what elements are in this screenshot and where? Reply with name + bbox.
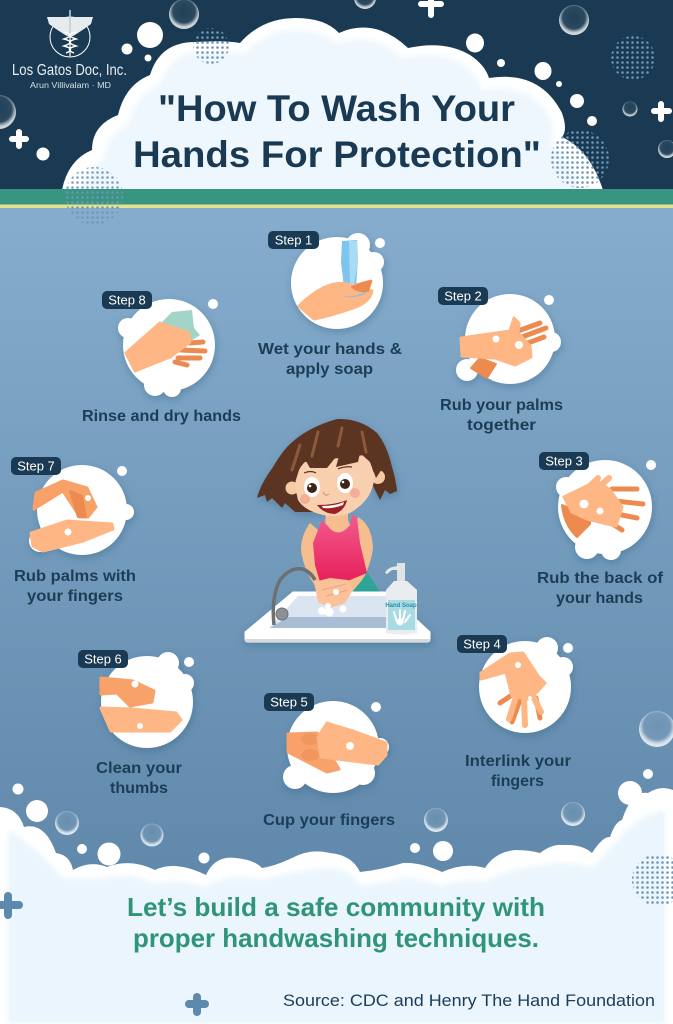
step 3 <box>537 452 664 607</box>
bottom white bubbles <box>12 769 653 866</box>
ears <box>286 470 385 494</box>
icon: palms with fingers <box>31 481 113 551</box>
halftone dots over band <box>65 167 123 225</box>
step 3: Step 3 <box>545 454 583 468</box>
icon: rubbing palms <box>461 318 546 378</box>
skin arms and neck <box>301 508 373 600</box>
step 6 caption <box>96 760 182 797</box>
skirt <box>352 573 380 592</box>
step 2 pill <box>438 287 488 305</box>
title <box>133 88 541 175</box>
icon: cupped fingers <box>288 723 386 772</box>
step 6 bubble <box>101 652 194 748</box>
step 4 caption: Interlink your <box>465 753 571 770</box>
bottom plus icons <box>0 896 205 1012</box>
logo: Los Gatos Doc <box>12 10 127 90</box>
step 7 caption: your fingers <box>27 588 123 605</box>
icon: caduceus emblem <box>47 10 93 57</box>
step 3 caption: your hands <box>556 590 643 607</box>
doctor name: Arun Villivalam · MD <box>30 81 111 90</box>
step 7 caption <box>14 568 136 605</box>
step 4 bubble <box>479 637 573 733</box>
step 6 caption: thumbs <box>110 780 168 797</box>
step 1: Step 1 <box>275 232 312 248</box>
washing hands and foam <box>314 578 353 616</box>
header halftone dots right <box>611 36 655 80</box>
fringe <box>296 430 388 480</box>
step 4: Step 4 <box>463 636 501 652</box>
step 1 <box>258 231 402 378</box>
step 2 caption: Rub your palms <box>440 397 563 414</box>
closing message: Let’s build a safe community with <box>127 892 545 922</box>
step 1 bubble <box>291 233 384 329</box>
step 8 <box>82 291 241 425</box>
step 4 caption <box>465 753 571 790</box>
header cloud <box>62 18 603 200</box>
hair <box>257 419 397 512</box>
step 3 caption: Rub the back of <box>537 570 664 587</box>
step 7 caption: Rub palms with <box>14 568 136 585</box>
step 7: Step 7 <box>17 458 55 474</box>
step 6 <box>78 650 194 797</box>
step 6 pill <box>78 650 128 668</box>
hair highlights <box>292 428 366 470</box>
main blue background <box>0 205 673 905</box>
icon: cleaning thumbs <box>101 678 181 731</box>
step 1 caption <box>258 341 402 378</box>
icon: water on hand <box>299 240 372 319</box>
step 2 caption <box>440 397 563 434</box>
step 2 bubble <box>456 294 561 384</box>
source line: Source: CDC and Henry The Hand Foundation <box>283 991 655 1010</box>
company name: Los Gatos Doc, Inc. <box>12 62 127 79</box>
bottom glass bubbles <box>55 802 585 846</box>
right side glass bubble <box>639 711 673 747</box>
title: "How To Wash Your <box>158 88 515 129</box>
face <box>295 455 374 516</box>
pink top <box>313 515 367 582</box>
step 5 <box>263 693 395 829</box>
title: Hands For Protection" <box>133 134 541 175</box>
step 8 caption: Rinse and dry hands <box>82 408 241 425</box>
soap bottle <box>385 563 417 634</box>
header panel <box>0 0 673 189</box>
sink <box>245 592 430 642</box>
step 3 bubble <box>556 460 652 560</box>
step 7 <box>11 457 136 605</box>
step 5 bubble <box>283 701 389 793</box>
icon: interlinked fingers <box>481 653 545 725</box>
bottom soap foam panel <box>0 788 673 1024</box>
mouth <box>317 500 347 514</box>
step 8 pill <box>102 291 152 309</box>
soap bottle: Hand Soap <box>385 603 417 609</box>
halftone dots on cloud <box>193 28 609 188</box>
bottom halftone dots <box>632 854 673 906</box>
faucet <box>273 569 315 625</box>
step 5 pill <box>264 693 314 711</box>
step 2: Step 2 <box>444 288 482 304</box>
step 1 caption: apply soap <box>286 361 373 378</box>
icon: back of hands <box>562 478 643 537</box>
closing message: proper handwashing techniques. <box>133 923 539 953</box>
icon: rinse with towel <box>126 310 205 371</box>
step 2 caption: together <box>467 417 536 434</box>
closing message <box>127 892 545 953</box>
step 5: Step 5 <box>270 694 308 710</box>
step 8 bubble <box>118 299 215 397</box>
step 7 pill <box>11 457 61 475</box>
header plus icons <box>12 0 669 146</box>
step 3 caption <box>537 570 664 607</box>
step 4 caption: fingers <box>491 773 544 790</box>
eyes <box>304 467 353 497</box>
step 1 caption: Wet your hands & <box>258 341 402 358</box>
step 4 <box>457 635 573 790</box>
girl washing hands <box>245 419 430 642</box>
step 8: Step 8 <box>108 292 146 308</box>
step 6 caption: Clean your <box>96 760 182 777</box>
header glass bubbles <box>0 0 673 158</box>
header white bubbles <box>36 22 597 160</box>
green and yellow band <box>0 189 673 208</box>
step 7 bubble <box>29 465 134 555</box>
step 1 pill <box>268 231 319 249</box>
step 5 caption: Cup your fingers <box>263 812 395 829</box>
step 2 <box>438 287 563 434</box>
step 3 pill <box>539 452 589 470</box>
cheeks <box>300 488 360 504</box>
step 6: Step 6 <box>84 652 122 666</box>
nose <box>323 492 329 495</box>
step 4 pill <box>457 635 507 653</box>
